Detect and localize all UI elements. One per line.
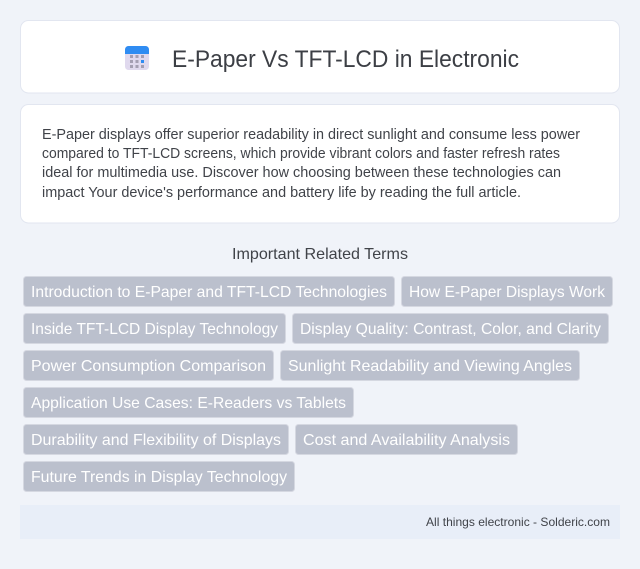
intro text: impact Your device's performance and battery life by reading the full article. xyxy=(42,185,521,201)
tag: power consumption: Power Consumption Comparison xyxy=(31,358,266,375)
intro text xyxy=(42,127,580,201)
footer bar xyxy=(20,505,620,539)
tag: durability xyxy=(24,424,288,454)
tag: inside tft-lcd: Inside TFT-LCD Display Technology xyxy=(31,321,278,338)
tag: application use cases xyxy=(24,388,354,418)
tag: cost: Cost and Availability Analysis xyxy=(303,432,510,449)
tag: sunlight readability xyxy=(280,350,580,380)
title: E-Paper Vs TFT-LCD in Electronic xyxy=(172,46,519,73)
tag: display quality: Display Quality: Contrast, Color, and Clarity xyxy=(300,321,601,338)
tag: cost xyxy=(296,424,518,454)
intro text: E-Paper displays offer superior readability in direct sunlight and consume less power xyxy=(42,127,580,143)
tag group xyxy=(24,276,612,492)
tag: future trends xyxy=(24,462,294,492)
tag: future trends: Future Trends in Display Technology xyxy=(31,469,287,486)
header panel xyxy=(20,20,620,93)
tag: durability: Durability and Flexibility of Displays xyxy=(31,432,281,449)
intro text: ideal for multimedia use. Discover how choosing between these technologies can xyxy=(42,165,561,181)
tag: how e-paper works: How E-Paper Displays Work xyxy=(409,284,606,301)
tag: display quality xyxy=(292,314,608,344)
icon: calendar grid xyxy=(125,46,149,70)
tag: sunlight readability: Sunlight Readability and Viewing Angles xyxy=(288,358,572,375)
tag: application use cases: Application Use Cases: E-Readers vs Tablets xyxy=(31,395,346,412)
tag: introduction: Introduction to E-Paper and TFT-LCD Technologies xyxy=(31,284,387,301)
tag: introduction xyxy=(24,276,394,306)
intro text: compared to TFT-LCD screens, which provide vibrant colors and faster refresh rates xyxy=(42,146,560,162)
tag: power consumption xyxy=(24,350,274,380)
tag: how e-paper works xyxy=(402,276,612,306)
heading: related terms: Important Related Terms xyxy=(232,246,408,263)
panel: intro paragraph xyxy=(20,104,620,223)
footer credit: All things electronic - Solderic.com xyxy=(426,515,610,529)
tag: inside tft-lcd xyxy=(24,314,286,344)
